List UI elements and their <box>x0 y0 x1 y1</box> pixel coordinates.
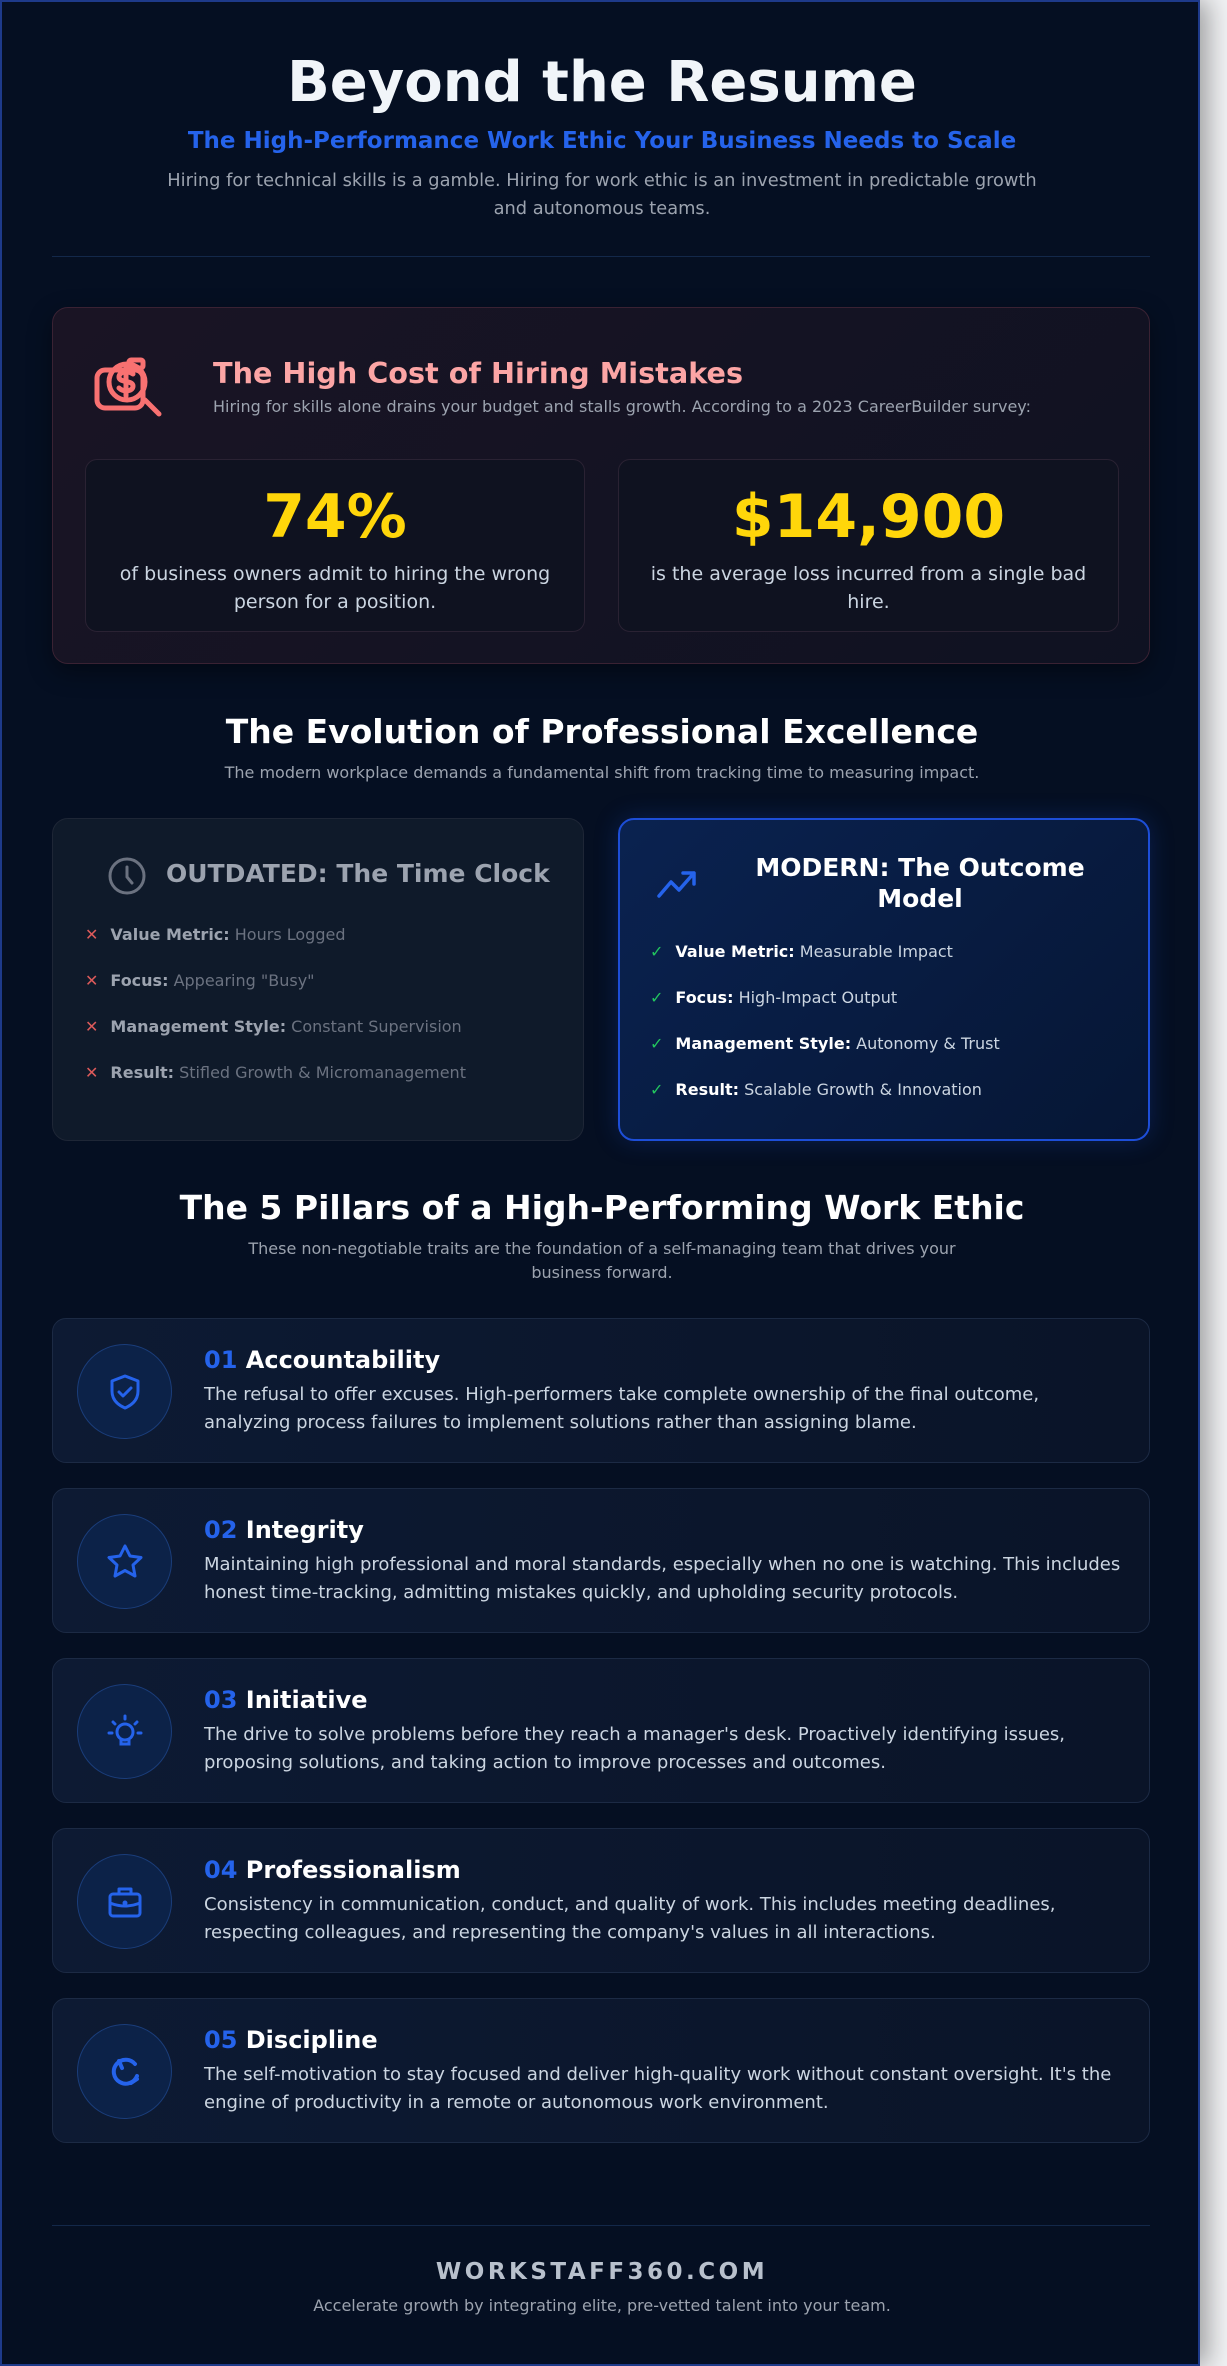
list: ✓ Management Style: Autonomy & Trust <box>650 1034 1000 1053</box>
list: ✕ Management Style: Constant Supervision <box>85 1017 462 1036</box>
list <box>85 925 466 1082</box>
panel: outdated time clock <box>52 818 584 1141</box>
icon: money warning <box>94 358 162 416</box>
heading: evolution: The Evolution of Professional Excellence <box>226 712 978 751</box>
pillar 04 <box>52 1828 1150 1973</box>
panel: cost of hiring mistakes <box>52 307 1150 664</box>
pillar 04: Consistency in communication, conduct, and quality of work. This includes meeting deadlines, respecting colleagues, and representing the company's values in all interactions. <box>204 1894 1056 1943</box>
stat: 74%: 74% <box>263 482 407 552</box>
stat: 74% <box>85 459 585 632</box>
heading: MODERN: The Outcome Model <box>755 853 1085 913</box>
icon: lightbulb <box>77 1684 172 1779</box>
list: ✕ Result: Stifled Growth & Micromanagement <box>85 1063 466 1082</box>
subtext: The modern workplace demands a fundamental shift from tracking time to measuring impact. <box>225 763 979 782</box>
pillar 03: 03 Initiative <box>204 1686 368 1714</box>
icon: shield <box>77 1344 172 1439</box>
pillar 05: The self-motivation to stay focused and deliver high-quality work without constant oversight. It's the engine of productivity in a remote or autonomous work environment. <box>204 2064 1111 2113</box>
title: Beyond the Resume <box>287 50 917 115</box>
stat: $14,900: $14,900 <box>732 482 1005 552</box>
footer tagline: Accelerate growth by integrating elite, pre-vetted talent into your team. <box>313 2296 891 2315</box>
pillar 02: Maintaining high professional and moral standards, especially when no one is watching. This includes honest time-tracking, admitting mistakes quickly, and upholding security protocols. <box>204 1554 1120 1603</box>
heading: 5 pillars: The 5 Pillars of a High-Performing Work Ethic <box>180 1188 1024 1227</box>
heading: The High Cost of Hiring Mistakes <box>213 356 743 390</box>
stat: $14,900 <box>618 459 1119 632</box>
stat: 74%: of business owners admit to hiring the wrong person for a position. <box>120 563 550 613</box>
icon: star <box>77 1514 172 1609</box>
pillar 01: The refusal to offer excuses. High-performers take complete ownership of the final outcome, analyzing process failures to implement solutions rather than assigning blame. <box>204 1384 1039 1433</box>
pillar 04: 04 Professionalism <box>204 1856 461 1884</box>
pillar 05: 05 Discipline <box>204 2026 378 2054</box>
list: ✓ Value Metric: Measurable Impact <box>650 942 953 961</box>
icon: trending up <box>657 871 696 898</box>
icon: briefcase <box>77 1854 172 1949</box>
panel: modern outcome model <box>618 818 1150 1141</box>
heading: OUTDATED: The Time Clock <box>166 859 550 888</box>
icon: refresh <box>77 2024 172 2119</box>
list: ✕ Value Metric: Hours Logged <box>85 925 345 944</box>
pillar 02: 02 Integrity <box>204 1516 364 1544</box>
list: ✕ Focus: Appearing "Busy" <box>85 971 315 990</box>
pillar 02 <box>52 1488 1150 1633</box>
subtext: These non-negotiable traits are the foundation of a self-managing team that drives your business forward. <box>248 1239 956 1282</box>
pillar 05 <box>52 1998 1150 2143</box>
text: Hiring for skills alone drains your budget and stalls growth. According to a 2023 CareerBuilder survey: <box>213 397 1031 416</box>
pillar 01: 01 Accountability <box>204 1346 440 1374</box>
stat: $14,900: is the average loss incurred from a single bad hire. <box>651 563 1086 613</box>
pillar 01 <box>52 1318 1150 1463</box>
list: ✓ Result: Scalable Growth & Innovation <box>650 1080 982 1099</box>
pillar 03: The drive to solve problems before they reach a manager's desk. Proactively identifying issues, proposing solutions, and taking action to improve processes and outcomes. <box>204 1724 1065 1773</box>
list <box>650 942 1000 1099</box>
intro text: Hiring for technical skills is a gamble. Hiring for work ethic is an investment in predictable growth and autonomous teams. <box>167 170 1037 219</box>
icon: clock <box>108 858 146 894</box>
list: ✓ Focus: High-Impact Output <box>650 988 897 1007</box>
subtitle: The High-Performance Work Ethic Your Business Needs to Scale <box>188 128 1016 154</box>
footer brand: WORKSTAFF360.COM <box>436 2259 768 2285</box>
pillar 03 <box>52 1658 1150 1803</box>
